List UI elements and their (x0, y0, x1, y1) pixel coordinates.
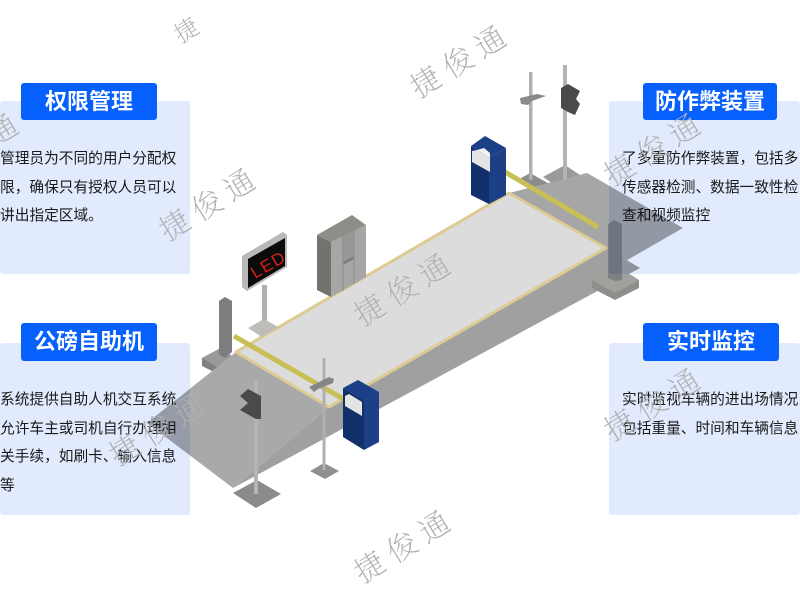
platform side wall (233, 248, 640, 488)
far barrier gate (471, 136, 598, 227)
heading: anti-cheat device (643, 83, 777, 120)
far camera pole (520, 72, 546, 180)
text: self-service description: 关手续，如刷卡、输入信息 (0, 449, 176, 465)
near signal light pole (233, 380, 281, 508)
text: monitoring description (622, 391, 798, 437)
near barrier gate (343, 380, 379, 450)
text: permission description: 讲出指定区域。 (0, 208, 103, 224)
panel: permission management (0, 101, 190, 274)
far signal light pole (561, 65, 580, 180)
watermarks: 捷俊通 (400, 9, 520, 107)
heading: self-service weighing: 公磅自助机 (34, 329, 144, 354)
watermarks: 捷俊通 (594, 352, 714, 450)
panel: real-time monitoring (609, 343, 800, 515)
text: self-service description (0, 391, 176, 494)
panel: self-service weighing (0, 343, 190, 515)
heading: self-service weighing (21, 323, 157, 361)
watermarks: 捷俊通 (99, 377, 219, 475)
panel: anti-cheat device (609, 101, 800, 274)
watermarks: 捷俊通 (344, 237, 464, 335)
equipment cabinet (317, 215, 366, 297)
text: monitoring description: 包括重量、时间和车辆信息 (622, 421, 798, 437)
watermarks: 捷俊通 (594, 97, 714, 195)
near ramp (147, 352, 329, 488)
text: permission description (0, 150, 176, 224)
text: permission description: 管理员为不同的用户分配权 (0, 151, 176, 167)
near barrier arm (234, 336, 345, 400)
near camera pole (309, 358, 339, 479)
LED display (242, 232, 290, 337)
heading: real-time monitoring: 实时监控 (667, 329, 755, 354)
near post and base (202, 297, 240, 376)
heading: permission management (21, 83, 157, 120)
text: permission description: 限，确保只有授权人员可以 (0, 180, 176, 196)
watermarks: 捷俊通 (344, 494, 464, 592)
watermarks: 捷 (166, 3, 212, 50)
text: anti-cheat description: 了多重防作弊装置，包括多 (622, 151, 798, 167)
far ramp (509, 173, 683, 263)
far pole bases (516, 165, 580, 194)
text: anti-cheat description: 传感器检测、数据一致性检 (622, 180, 798, 196)
text: self-service description: 允许车主或司机自行办理相 (0, 421, 176, 437)
heading: permission management: 权限管理 (45, 89, 133, 114)
text: monitoring description: 实时监视车辆的进出场情况 (622, 392, 798, 408)
watermarks: 捷俊通 (149, 152, 269, 250)
far post and base (592, 220, 639, 300)
LED display: LED (248, 247, 290, 282)
text: anti-cheat description (622, 150, 798, 224)
text: anti-cheat description: 查和视频监控 (622, 208, 710, 224)
heading: anti-cheat device: 防作弊装置 (655, 89, 765, 114)
weighing deck (236, 193, 606, 407)
text: self-service description: 系统提供自助人机交互系统 (0, 392, 176, 408)
heading: real-time monitoring (643, 323, 779, 361)
text: self-service description: 等 (0, 478, 15, 494)
